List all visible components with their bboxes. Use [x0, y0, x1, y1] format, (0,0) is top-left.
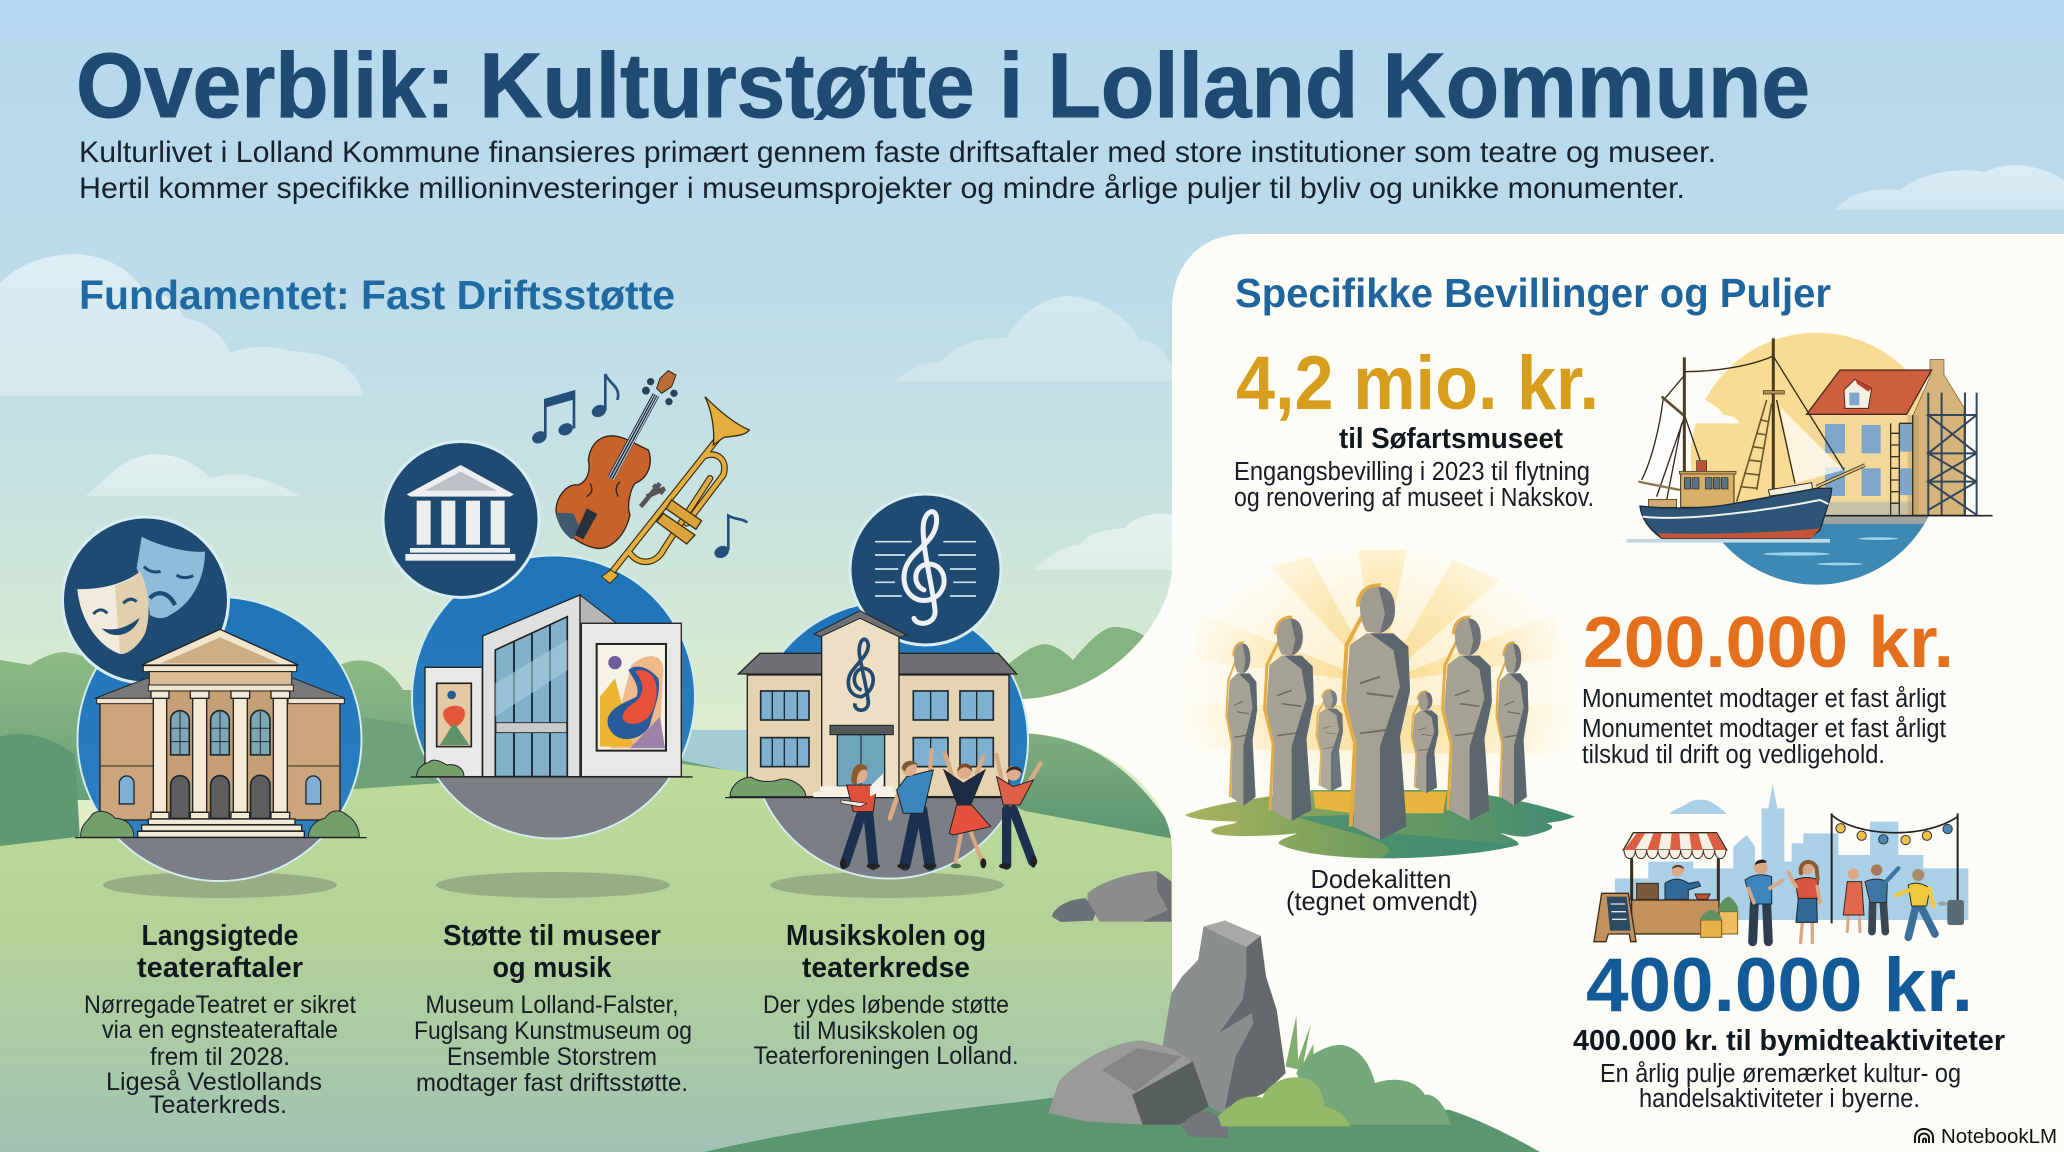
water reflections — [1627, 537, 1898, 565]
card text: music school: til Musikskolen og — [794, 1017, 978, 1045]
right lower hill — [1000, 733, 1180, 840]
icon: theatre masks — [62, 517, 228, 683]
clouds — [0, 165, 2064, 570]
people dancing — [840, 750, 1041, 869]
illustration: Dodekalitten stones — [1180, 550, 1580, 858]
stat: 4,2 mio. kr.: Engangsbevilling i 2023 til flytning — [1234, 458, 1590, 486]
card text: theatre agreements: teateraftaler — [137, 952, 303, 984]
card text: museums and music: modtager fast driftsstøtte. — [416, 1069, 688, 1097]
grass island — [1185, 790, 1575, 858]
card text: music school: Teaterforeningen Lolland. — [754, 1042, 1018, 1070]
illustration: town market — [1594, 784, 1968, 943]
stat: 200.000 kr. — [1582, 603, 1954, 769]
card text: music school — [754, 920, 1018, 1070]
stat: 200.000 kr.: Monumentet modtager et fast årligt — [1582, 715, 1946, 743]
intro text: Kulturlivet i Lolland Kommune finansieres primært gennem faste driftsaftaler med store institutioner som teatre og museer. — [79, 136, 1716, 169]
stat: 400.000 kr.: 400.000 kr. til bymidteaktiviteter — [1573, 1025, 2005, 1057]
panel: specific grants background — [1023, 234, 2064, 1152]
caption: Dodekalitten: (tegnet omvendt) — [1286, 886, 1478, 916]
stat: 400.000 kr.: En årlig pulje øremærket kultur- og — [1600, 1060, 1961, 1088]
stat: 200.000 kr.: Monumentet modtager et fast årligt — [1582, 685, 1946, 713]
card text: theatre agreements: NørregadeTeatret er sikret — [84, 991, 356, 1019]
stat: 4,2 mio. kr.: og renovering af museet i Nakskov. — [1234, 484, 1594, 512]
museum building — [1807, 359, 1993, 516]
card text: music school: Musikskolen og — [786, 920, 986, 952]
stat: 4,2 mio. kr.: 4,2 mio. kr. — [1236, 341, 1599, 426]
ground meadow — [0, 764, 1200, 1152]
caption: Dodekalitten: Dodekalitten — [1310, 864, 1452, 894]
icon: classical building — [383, 442, 539, 598]
card text: theatre agreements: Langsigtede — [142, 920, 298, 952]
stat: 400.000 kr. — [1573, 943, 2005, 1113]
string lights — [1832, 813, 1964, 925]
stone figures — [1226, 585, 1528, 840]
card text: music school: teaterkredse — [802, 952, 970, 984]
violin — [556, 436, 650, 548]
intro text — [79, 136, 1716, 205]
stat: 4,2 mio. kr. — [1234, 341, 1599, 512]
music notes — [530, 374, 747, 560]
foreground rocks and bushes — [1048, 921, 1451, 1138]
fishing boat — [1638, 338, 1865, 538]
trumpet — [608, 440, 724, 577]
foreground hill — [704, 1098, 1540, 1152]
card text: theatre agreements: Teaterkreds. — [149, 1091, 287, 1119]
card text: music school: Der ydes løbende støtte — [763, 991, 1009, 1019]
logo: NotebookLM: NotebookLM — [1941, 1126, 2057, 1148]
stat: 200.000 kr.: tilskud til drift og vedligehold. — [1582, 741, 1885, 769]
card text: museums and music: Fuglsang Kunstmuseum og — [414, 1017, 692, 1045]
card text: theatre agreements: frem til 2028. — [150, 1043, 290, 1071]
stat: 4,2 mio. kr.: til Søfartsmuseet — [1339, 423, 1563, 455]
icon: music notes, violin and trumpet — [530, 371, 749, 583]
card text: museums and music: Museum Lolland-Falster, — [426, 991, 678, 1019]
small boulders — [1052, 871, 1171, 922]
illustration: theatre — [62, 517, 370, 898]
card text: theatre agreements: Ligeså Vestlollands — [106, 1068, 322, 1096]
illustration: music school — [725, 494, 1045, 898]
caption: Dodekalitten — [1286, 864, 1478, 916]
stat: 400.000 kr.: handelsaktiviteter i byerne. — [1639, 1085, 1920, 1113]
far hills and sea — [0, 627, 1150, 850]
stat: 400.000 kr.: 400.000 kr. — [1586, 943, 1973, 1028]
heading: right section: Specifikke Bevillinger og Puljer — [1235, 270, 1831, 316]
icon: treble clef — [850, 494, 1001, 645]
card text: theatre agreements: via en egnsteateraftale — [102, 1016, 338, 1044]
illustration: museum — [383, 371, 749, 898]
people at market — [1745, 860, 1935, 943]
market stall — [1594, 833, 1738, 942]
card text: theatre agreements — [84, 920, 356, 1119]
illustration: ship and maritime museum — [1627, 333, 1993, 587]
skyline — [1615, 784, 1968, 920]
title: Overblik: Kulturstøtte i Lolland Kommune — [76, 35, 1810, 137]
card text: museums and music — [414, 920, 692, 1097]
intro text: Hertil kommer specifikke millioninvesteringer i museumsprojekter og mindre årlige puljer til byliv og unikke monumenter. — [79, 172, 1685, 205]
card text: museums and music: og musik — [492, 952, 612, 984]
heading: left section: Fundamentet: Fast Driftsstøtte — [79, 272, 675, 318]
card text: museums and music: Ensemble Storstrem — [447, 1043, 657, 1071]
card text: museums and music: Støtte til museer — [443, 920, 661, 952]
stat: 200.000 kr.: 200.000 kr. — [1583, 603, 1954, 683]
